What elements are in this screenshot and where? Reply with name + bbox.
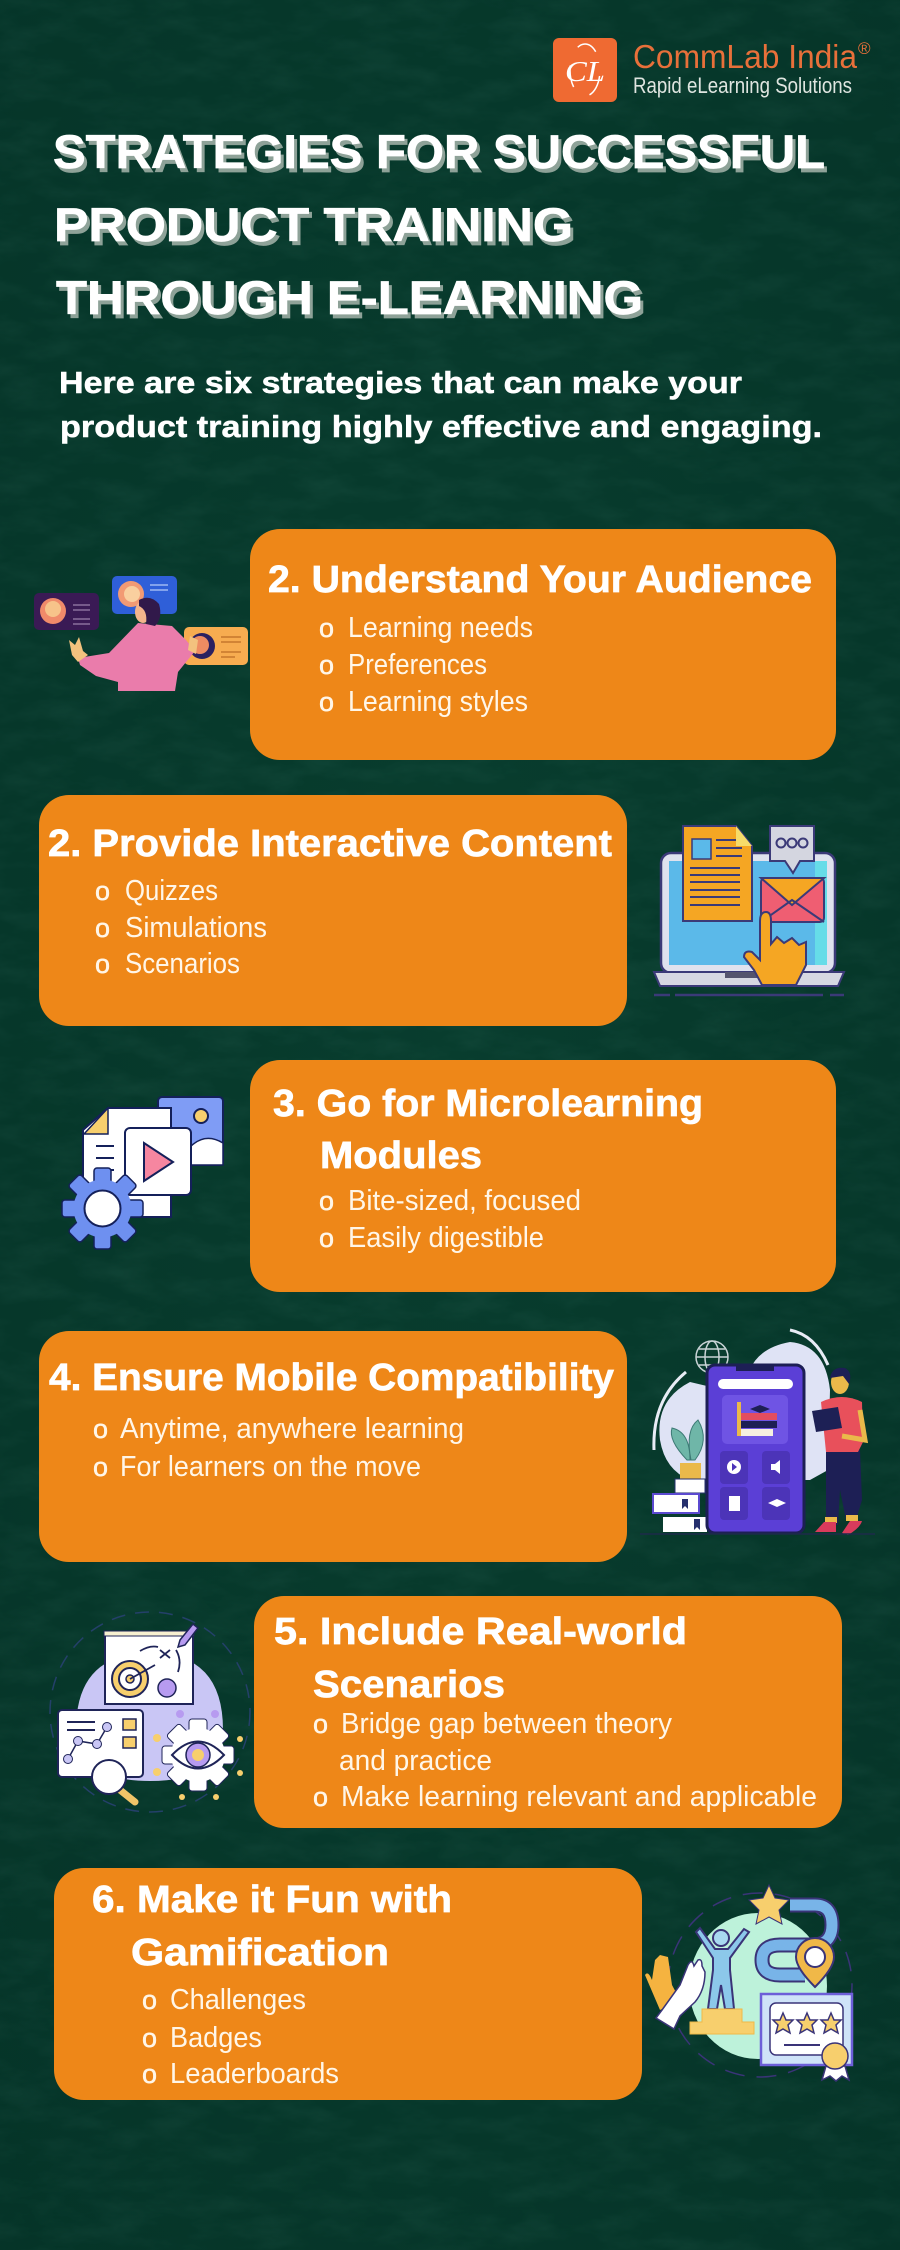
heading: 5. Include Real-world [274,1611,687,1653]
icon: CL logo mark [553,38,617,102]
heading: Modules [320,1135,482,1177]
heading: 6. Make it Fun with [92,1879,452,1921]
icon: real-world scenario board, dashboard and eye gear [50,1612,250,1812]
registered mark: ® [858,39,871,58]
heading [92,1879,452,1974]
bullet list: o [313,1782,328,1812]
bullet list: o [319,650,334,680]
logo: CommLab India [553,38,871,102]
logo tagline: Rapid eLearning Solutions [633,73,852,98]
panel: provide interactive content [39,795,627,1026]
bullet list: Leaderboards [170,2058,339,2090]
heading [273,1083,703,1177]
bullet list: Challenges [170,1984,306,2016]
icon: microlearning modules with video, image and gear [62,1097,223,1249]
icon: laptop with document, email and pointing hand [654,826,844,995]
bullet list: o [319,1223,334,1253]
bullet list: o [142,1985,157,2015]
bullet list [93,1413,464,1483]
bullet list: Easily digestible [348,1222,544,1254]
title [53,125,825,324]
bullet list: o [313,1709,328,1739]
heading: 3. Go for Microlearning [273,1083,703,1125]
intro text: Here are six strategies that can make your [59,365,742,400]
intro text: product training highly effective and engaging. [60,409,822,444]
bullet list: Make learning relevant and applicable [341,1781,817,1813]
bullet list [95,875,267,980]
bullet list: o [93,1452,108,1482]
bullet list: Scenarios [125,948,240,980]
heading: 2. Provide Interactive Content [48,823,612,865]
bullet list: Simulations [125,912,267,944]
heading: Gamification [131,1932,389,1974]
bullet list: Quizzes [125,875,218,907]
heading: 4. Ensure Mobile Compatibility [49,1357,614,1399]
bullet list: o [95,876,110,906]
bullet list: Badges [170,2022,262,2054]
icon: gamification trophy figure, clapping hands and certificate [645,1885,852,2081]
panel: go for microlearning modules [250,1060,836,1292]
bullet list: o [95,913,110,943]
bullet list [319,1185,581,1254]
heading [274,1611,687,1706]
bullet list: o [319,1186,334,1216]
bullet list: o [142,2023,157,2053]
bullet list: o [319,687,334,717]
bullet list [313,1708,817,1813]
title: STRATEGIES FOR SUCCESSFUL [53,125,825,178]
bullet list: Bridge gap between theory [341,1708,672,1740]
bullet list: Anytime, anywhere learning [120,1413,464,1445]
icon: mobile phone with learner, plant and books [640,1330,875,1535]
bullet list: Preferences [348,649,487,681]
logo name: CommLab India [633,38,858,75]
bullet list: o [95,949,110,979]
intro text [59,365,822,444]
panel: understand your audience [250,529,836,760]
bullet list [142,1984,339,2090]
title: PRODUCT TRAINING [54,198,573,251]
bullet list: Learning needs [348,612,533,644]
bullet list [319,612,533,718]
panel: include real-world scenarios [254,1596,842,1828]
bullet list: Learning styles [348,686,528,718]
panel: ensure mobile compatibility [39,1331,627,1562]
bullet list: Bite-sized, focused [348,1185,581,1217]
bullet list: o [142,2059,157,2089]
panel: make it fun with gamification [54,1868,642,2100]
heading: Scenarios [313,1664,505,1706]
icon: CL logo mark: CL [565,56,605,88]
bullet list: For learners on the move [120,1451,421,1483]
bullet list: and practice [339,1745,492,1777]
icon: person with audience profile cards [34,576,248,691]
bullet list: o [93,1414,108,1444]
heading: 2. Understand Your Audience [268,559,812,601]
title: THROUGH E-LEARNING [56,271,643,324]
bullet list: o [319,613,334,643]
